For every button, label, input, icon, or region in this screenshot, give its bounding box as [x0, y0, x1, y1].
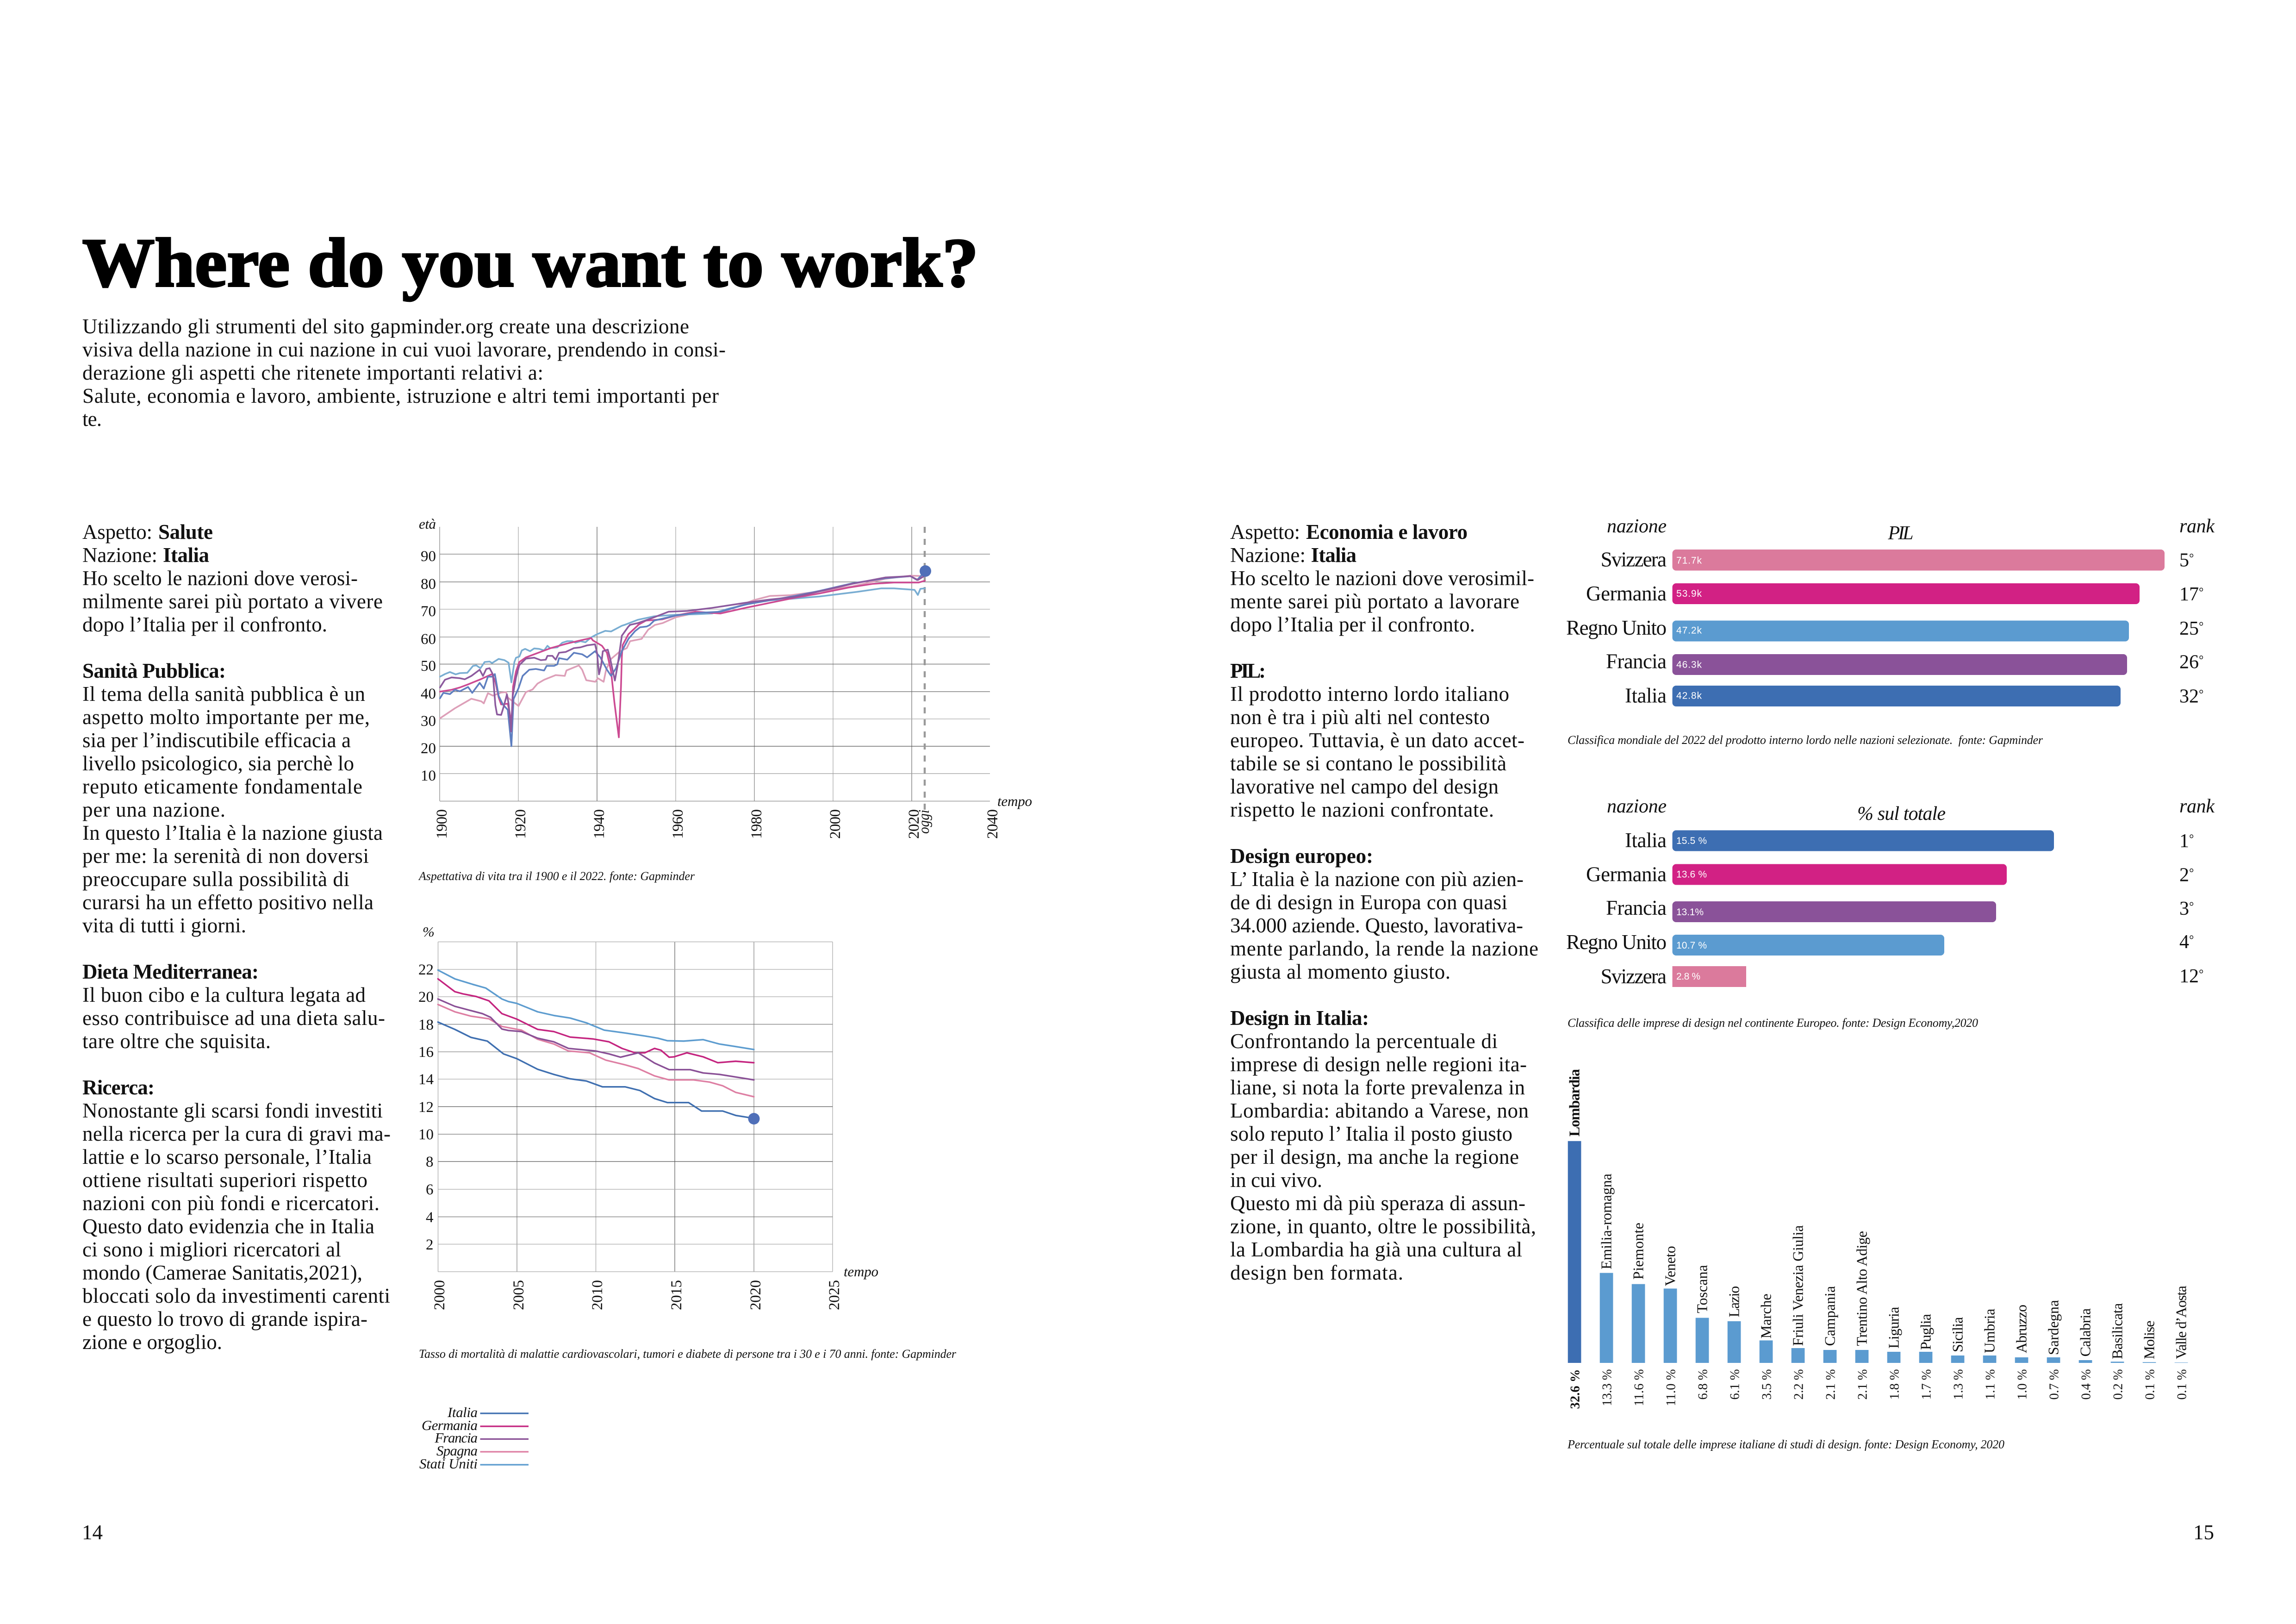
panel: salute text column: Nonostante gli scarsi fondi investiti	[82, 1099, 383, 1122]
row: Svizzera	[1600, 548, 2194, 571]
y axis labels	[421, 548, 436, 784]
panel: salute text column: livello psicologico, sia perchè lo	[82, 752, 354, 775]
bar: Lombardia	[1566, 1069, 1583, 1409]
bar: Veneto: Veneto	[1662, 1246, 1679, 1286]
panel: salute text column: In questo l’Italia è la nazione giusta	[82, 821, 383, 844]
panel: economia e lavoro text column: mente sarei più portato a lavorare	[1230, 590, 1519, 613]
row: Italia: 1	[2179, 831, 2189, 852]
intro text block: Salute, economia e lavoro, ambiente, istruzione e altri temi importanti per	[82, 384, 719, 407]
y axis labels: 18	[418, 1017, 434, 1033]
panel: economia e lavoro text column: per il design, ma anche la regione	[1230, 1145, 1519, 1168]
row: Francia: 26	[2179, 652, 2199, 673]
y axis labels: 12	[418, 1099, 434, 1116]
panel: salute text column: bloccati solo da investimenti carenti	[82, 1284, 390, 1307]
bar: Lombardia: Lombardia	[1566, 1069, 1583, 1137]
panel: salute text column: Dieta Mediterranea:	[82, 960, 259, 983]
panel: salute text column: e questo lo trovo di grande ispira-	[82, 1307, 367, 1330]
row: Regno Unito	[1566, 616, 2203, 642]
row: Regno Unito: Regno Unito	[1566, 616, 1667, 639]
chart: aspettativa di vita	[419, 516, 1032, 839]
row: Germania	[1586, 582, 2203, 605]
row: Regno Unito: °	[2189, 933, 2194, 946]
caption: mortalità: Tasso di mortalità di malattie cardiovascolari, tumori e diabete di persone tra i 30 e i 70 anni. fonte: Gapminder	[419, 1347, 957, 1361]
bar: Umbria: Umbria	[1981, 1309, 1998, 1353]
panel: economia e lavoro text column: in cui vivo.	[1230, 1168, 1322, 1192]
column heading: rank: rank	[2179, 516, 2215, 537]
bar: Sardegna: 0.7 %	[2047, 1369, 2062, 1400]
panel: economia e lavoro text column: dopo l’Italia per il confronto.	[1230, 613, 1475, 636]
panel: economia e lavoro text column	[1230, 520, 1538, 1284]
intro text block: te.	[82, 407, 102, 431]
row: Svizzera: 2.8 %	[1676, 971, 1700, 982]
x axis labels: 1960	[670, 809, 686, 839]
panel: salute text column: aspetto molto importante per me,	[82, 706, 370, 729]
x axis labels: 1900	[434, 809, 450, 839]
line: Germania	[440, 581, 925, 737]
row: Francia: Francia	[1606, 650, 1667, 673]
bar: Emilia-romagna: Emilia-romagna	[1598, 1174, 1615, 1269]
row: Germania: 2	[2179, 865, 2189, 886]
bar: Trentino Alto Adige: 2.1 %	[1856, 1369, 1870, 1400]
panel: economia e lavoro text column: lavorative nel campo del design	[1230, 775, 1499, 798]
bar: Puglia: Puglia	[1917, 1314, 1934, 1350]
bar: Lazio: Lazio	[1726, 1286, 1742, 1317]
chart heading: PIL: PIL	[1887, 523, 1913, 544]
panel: economia e lavoro text column: tabile se si contano le possibilità	[1230, 752, 1506, 775]
row: Francia: °	[2189, 899, 2194, 913]
bar: Emilia-romagna: 13.3 %	[1600, 1369, 1615, 1406]
x axis labels: 2020	[747, 1280, 764, 1310]
bar: Liguria: 1.8 %	[1888, 1369, 1902, 1400]
bar: Calabria: 0.4 %	[2079, 1369, 2094, 1400]
panel: economia e lavoro text column: zione, in quanto, oltre le possibilità,	[1230, 1215, 1536, 1238]
bar: Valle d'Aosta: 0.1 %	[2175, 1369, 2190, 1400]
bar: Veneto: 11.0 %	[1664, 1369, 1679, 1406]
panel: salute text column: Questo dato evidenzia che in Italia	[82, 1215, 374, 1238]
legend: Italia	[447, 1404, 478, 1420]
panel: economia e lavoro text column: liane, si nota la forte prevalenza in	[1230, 1076, 1525, 1099]
marker: oggi dashed line	[924, 527, 926, 811]
row: Germania: Germania	[1586, 863, 1667, 886]
panel: economia e lavoro text column: Ho scelto le nazioni dove verosimil-	[1230, 567, 1534, 590]
panel: economia e lavoro text column: mente parlando, la rende la nazione	[1230, 937, 1538, 960]
bar: Sicilia	[1949, 1317, 1966, 1400]
y axis labels: 2	[426, 1237, 433, 1253]
legend: Stati Uniti	[419, 1455, 478, 1472]
x axis labels: 1940	[591, 809, 608, 839]
row: Italia: °	[2199, 687, 2203, 701]
bar: Liguria: Liguria	[1885, 1307, 1902, 1349]
row: Svizzera: Svizzera	[1600, 965, 1667, 988]
x axis labels: 2000	[827, 809, 844, 839]
row: Francia: 3	[2179, 898, 2189, 919]
bar: Piemonte	[1630, 1223, 1647, 1406]
panel: economia e lavoro text column: Aspetto:	[1230, 520, 1300, 543]
bar: Lazio	[1726, 1286, 1742, 1400]
panel: salute text column: ci sono i migliori ricercatori al	[82, 1238, 341, 1261]
panel: salute text column	[82, 520, 391, 1354]
panel: economia e lavoro text column: Italia	[1311, 543, 1356, 567]
row: Svizzera: °	[2189, 551, 2194, 565]
y axis labels: 40	[421, 686, 436, 702]
bar: Sardegna: Sardegna	[2045, 1300, 2062, 1355]
row: Germania: °	[2189, 866, 2194, 880]
row: Italia: 32	[2179, 686, 2199, 707]
x axis labels: 2015	[668, 1280, 685, 1310]
bar: Valle d'Aosta: Valle d’Aosta	[2173, 1286, 2190, 1359]
bar: Puglia: 1.7 %	[1920, 1369, 1934, 1400]
row: Italia: Italia	[1625, 829, 1667, 852]
row: Germania: 53.9k	[1676, 588, 1702, 599]
legend: Francia	[434, 1430, 478, 1446]
x axis labels	[431, 1280, 843, 1310]
y axis labels: 16	[418, 1044, 434, 1061]
y axis labels: 6	[426, 1181, 433, 1198]
x axis labels: 2005	[510, 1280, 527, 1310]
bar: Piemonte: Piemonte	[1630, 1223, 1647, 1280]
intro text block: derazione gli aspetti che ritenete importanti relativi a:	[82, 361, 543, 384]
chart heading: percentuale sul totale: % sul totale	[1857, 803, 1946, 824]
caption: aspettativa di vita: Aspettativa di vita tra il 1900 e il 2022. fonte: Gapminder	[418, 869, 695, 883]
bar: Marche	[1758, 1293, 1774, 1400]
chart: tasso di mortalità	[418, 924, 878, 1310]
row: Francia	[1606, 896, 2194, 922]
legend: Spagna	[436, 1443, 478, 1459]
column heading: rank: rank	[2179, 796, 2215, 817]
row: Italia: Italia	[1625, 684, 1667, 707]
y axis labels: 20	[418, 989, 434, 1006]
y axis labels: 60	[421, 631, 436, 648]
caption: PIL: Classifica mondiale del 2022 del prodotto interno lordo nelle nazioni selezionate. fonte: Gapminder	[1568, 733, 2043, 747]
line: Stati Uniti	[440, 588, 925, 682]
y axis labels: 50	[421, 658, 436, 675]
panel: salute text column: preoccupare sulla possibilità di	[82, 868, 349, 891]
legend	[419, 1404, 529, 1472]
panel: salute text column: mondo (Camerae Sanitatis,2021),	[82, 1261, 362, 1284]
row: Italia: °	[2189, 832, 2194, 845]
panel: economia e lavoro text column: L’ Italia è la nazione con più azien-	[1230, 868, 1524, 891]
legend: Germania	[422, 1417, 478, 1433]
panel: salute text column: curarsi ha un effetto positivo nella	[82, 891, 373, 914]
panel: salute text column: Nazione:	[82, 543, 157, 567]
y axis labels: 70	[421, 603, 436, 620]
panel: economia e lavoro text column: de di design in Europa con quasi	[1230, 891, 1507, 914]
row: Regno Unito: 4	[2179, 931, 2189, 953]
panel: economia e lavoro text column: imprese di design nelle regioni ita-	[1230, 1053, 1527, 1076]
panel: salute text column: Ho scelto le nazioni dove verosi-	[82, 567, 358, 590]
y axis labels: 8	[426, 1154, 433, 1170]
line: Spagna	[440, 575, 925, 718]
row: Germania	[1586, 863, 2194, 886]
panel: economia e lavoro text column: Design in Italia:	[1230, 1006, 1369, 1030]
y axis labels: 90	[421, 548, 436, 565]
y axis labels: 20	[421, 740, 436, 757]
panel: salute text column: dopo l’Italia per il confronto.	[82, 613, 327, 636]
panel: economia e lavoro text column: Questo mi dà più speraza di assun-	[1230, 1192, 1525, 1215]
panel: economia e lavoro text column: Economia e lavoro	[1306, 520, 1468, 543]
row: Svizzera: 71.7k	[1676, 556, 1702, 566]
x axis labels: 2010	[589, 1280, 606, 1310]
row: Italia: 15.5 %	[1676, 836, 1707, 846]
bar: Lombardia: 32.6 %	[1568, 1369, 1583, 1409]
y axis labels: 10	[421, 768, 436, 784]
panel: economia e lavoro text column: Design europeo:	[1230, 844, 1373, 868]
bar: Toscana: Toscana	[1694, 1265, 1711, 1313]
panel: salute text column: Ricerca:	[82, 1076, 155, 1099]
bar: Sicilia: Sicilia	[1949, 1317, 1966, 1352]
bar: Basilicata: Basilicata	[2109, 1303, 2126, 1359]
row: Italia	[1625, 684, 2203, 707]
intro text block	[82, 315, 726, 431]
panel: salute text column: Sanità Pubblica:	[82, 659, 226, 682]
bar: Sardegna	[2045, 1300, 2062, 1400]
row: Svizzera: 5	[2179, 550, 2189, 571]
panel: economia e lavoro text column: solo reputo l’ Italia il posto giusto	[1230, 1122, 1512, 1145]
row: Francia: Francia	[1606, 896, 1667, 919]
x axis labels: 2000	[431, 1280, 448, 1310]
panel: economia e lavoro text column: design ben formata.	[1230, 1261, 1403, 1284]
bar: Marche: 3.5 %	[1760, 1369, 1774, 1400]
page number: 14: 14	[82, 1521, 103, 1544]
x axis labels: 2040	[984, 809, 1001, 839]
panel: salute text column: tare oltre che squisita.	[82, 1030, 271, 1053]
panel: salute text column: Italia	[163, 543, 209, 567]
caption: regioni italiane: Percentuale sul totale delle imprese italiane di studi di design. fonte: Design Economy, 2020	[1567, 1438, 2004, 1451]
panel: economia e lavoro text column: rispetto le nazioni confrontate.	[1230, 798, 1494, 821]
bar: Basilicata	[2109, 1303, 2126, 1400]
bar: Sicilia: 1.3 %	[1952, 1369, 1966, 1400]
row: Francia: 46.3k	[1676, 659, 1702, 670]
row: Francia: 13.1%	[1676, 907, 1704, 918]
bar: Emilia-romagna	[1598, 1174, 1615, 1406]
bar chart: regioni italiane	[1566, 1069, 2190, 1409]
bar: Basilicata: 0.2 %	[2111, 1369, 2126, 1400]
title: Where do you want to work?	[82, 225, 978, 301]
bar: Molise	[2141, 1320, 2158, 1400]
row: Francia: °	[2199, 653, 2203, 667]
panel: economia e lavoro text column: Lombardia: abitando a Varese, non	[1230, 1099, 1529, 1122]
row: Francia	[1606, 650, 2203, 675]
row: Svizzera: 12	[2179, 966, 2199, 987]
panel: salute text column: sia per l’indiscutibile efficacia a	[82, 729, 351, 752]
line: Stati Uniti	[438, 970, 754, 1049]
y axis labels	[418, 962, 434, 1253]
bar: Lazio: 6.1 %	[1728, 1369, 1742, 1400]
line: Francia	[440, 575, 925, 731]
panel: economia e lavoro text column: Confrontando la percentuale di	[1230, 1030, 1498, 1053]
panel: salute text column: zione e orgoglio.	[82, 1330, 222, 1354]
bar: Abruzzo: 1.0 %	[2016, 1369, 2030, 1400]
panel: economia e lavoro text column: non è tra i più alti nel contesto	[1230, 706, 1490, 729]
intro text block: Utilizzando gli strumenti del sito gapminder.org create una descrizione	[82, 315, 689, 338]
bar: Friuli Venezia Giulia: 2.2 %	[1792, 1369, 1806, 1400]
bar: Valle d'Aosta	[2173, 1286, 2190, 1400]
panel: economia e lavoro text column: PIL:	[1230, 659, 1266, 682]
axis title: età: età	[419, 516, 436, 532]
row: Italia: 42.8k	[1676, 691, 1702, 701]
panel: salute text column: reputo eticamente fondamentale	[82, 775, 362, 798]
caption: imprese di design in Europa: Classifica delle imprese di design nel continente Europeo. fonte: Design Economy,2020	[1568, 1016, 1978, 1030]
panel: economia e lavoro text column: giusta al momento giusto.	[1230, 960, 1450, 983]
column heading: nazione: nazione	[1607, 796, 1667, 817]
row: Regno Unito: °	[2199, 619, 2203, 633]
panel: salute text column: Il tema della sanità pubblica è un	[82, 682, 365, 706]
x axis labels: 1920	[512, 809, 529, 839]
panel: salute text column: Il buon cibo e la cultura legata ad	[82, 983, 366, 1006]
bar: Marche: Marche	[1758, 1293, 1774, 1338]
panel: economia e lavoro text column: Nazione:	[1230, 543, 1306, 567]
row: Svizzera	[1600, 965, 2203, 988]
page number: 15: 15	[2193, 1521, 2214, 1544]
row: Regno Unito: 25	[2179, 618, 2199, 639]
row: Italia	[1625, 829, 2194, 852]
intro text block: visiva della nazione in cui nazione in cui vuoi lavorare, prendendo in consi-	[82, 338, 726, 361]
row: Regno Unito: 10.7 %	[1676, 940, 1707, 951]
x axis labels	[434, 809, 1001, 839]
x axis labels: 1980	[748, 809, 765, 839]
bar: Puglia	[1917, 1314, 1934, 1400]
row: Regno Unito: 47.2k	[1676, 625, 1702, 636]
panel: salute text column: Aspetto:	[82, 520, 152, 543]
bar: Friuli Venezia Giulia: Friuli Venezia Giulia	[1790, 1225, 1806, 1346]
row: Svizzera: °	[2199, 967, 2203, 981]
y axis labels: 80	[421, 576, 436, 593]
bar: Calabria: Calabria	[2077, 1308, 2094, 1356]
bar: Trentino Alto Adige: Trentino Alto Adige	[1854, 1231, 1870, 1346]
line: Italia	[440, 571, 925, 746]
bar: Piemonte: 11.6 %	[1632, 1369, 1647, 1406]
bar: Trentino Alto Adige	[1854, 1231, 1870, 1400]
y axis labels: 4	[426, 1209, 433, 1226]
line: Italia	[438, 1022, 754, 1118]
row: Germania: Germania	[1586, 582, 1667, 605]
row: Germania: 13.6 %	[1676, 869, 1707, 880]
bar: Campania	[1822, 1286, 1838, 1400]
panel: economia e lavoro text column: Il prodotto interno lordo italiano	[1230, 682, 1509, 706]
panel: salute text column: nella ricerca per la cura di gravi ma-	[82, 1122, 391, 1145]
y axis labels: 10	[418, 1126, 434, 1143]
panel: salute text column: milmente sarei più portato a vivere	[82, 590, 383, 613]
axis title: tempo: tempo	[997, 793, 1032, 809]
column heading: nazione: nazione	[1607, 516, 1667, 537]
bar: Veneto	[1662, 1246, 1679, 1406]
x axis labels: 2025	[826, 1280, 843, 1310]
bar: Molise: 0.1 %	[2143, 1369, 2158, 1400]
bar: Molise: Molise	[2141, 1320, 2158, 1359]
bar chart: imprese di design in Europa	[1566, 796, 2215, 988]
panel: salute text column: per una nazione.	[82, 798, 225, 821]
x axis labels: oggi	[916, 810, 933, 834]
bar: Umbria: 1.1 %	[1984, 1369, 1998, 1400]
row: Germania: °	[2199, 585, 2203, 599]
row: Regno Unito	[1566, 931, 2194, 956]
panel: economia e lavoro text column: europeo. Tuttavia, è un dato accet-	[1230, 729, 1524, 752]
line: Germania	[438, 979, 754, 1063]
row: Svizzera: Svizzera	[1600, 548, 1667, 571]
panel: economia e lavoro text column: la Lombardia ha già una cultura al	[1230, 1238, 1522, 1261]
panel: salute text column: esso contribuisce ad una dieta salu-	[82, 1006, 385, 1030]
bar: Toscana	[1694, 1265, 1711, 1400]
bar: Calabria	[2077, 1308, 2094, 1400]
y axis labels: 14	[418, 1071, 434, 1088]
bar: Toscana: 6.8 %	[1696, 1369, 1711, 1400]
y axis labels: 22	[418, 962, 434, 978]
bar: Campania: Campania	[1822, 1286, 1838, 1346]
panel: salute text column: Salute	[158, 520, 213, 543]
bar: Abruzzo	[2013, 1305, 2030, 1400]
bar: Friuli Venezia Giulia	[1790, 1225, 1806, 1400]
bar chart: PIL	[1566, 516, 2215, 707]
marker: Italia dot	[748, 1113, 760, 1124]
y axis labels: 30	[421, 713, 436, 730]
row: Regno Unito: Regno Unito	[1566, 931, 1667, 954]
panel: salute text column: per me: la serenità di non doversi	[82, 844, 369, 868]
line: Spagna	[438, 1005, 754, 1097]
panel: salute text column: ottiene risultati superiori rispetto	[82, 1168, 367, 1192]
row: Germania: 17	[2179, 584, 2199, 605]
marker: Italia dot	[920, 565, 931, 577]
panel: salute text column: nazioni con più fondi e ricercatori.	[82, 1192, 380, 1215]
bar: Abruzzo: Abruzzo	[2013, 1305, 2030, 1353]
x axis labels: 2020	[906, 809, 922, 839]
line: Francia	[438, 999, 754, 1080]
panel: economia e lavoro text column: 34.000 aziende. Questo, lavorativa-	[1230, 914, 1523, 937]
axis title: percent: %	[423, 924, 435, 940]
bar: Campania: 2.1 %	[1824, 1369, 1838, 1400]
bar: Liguria	[1885, 1307, 1902, 1400]
bar: Umbria	[1981, 1309, 1998, 1400]
panel: salute text column: lattie e lo scarso personale, l’Italia	[82, 1145, 372, 1168]
axis title: tempo: tempo	[844, 1263, 878, 1280]
panel: salute text column: vita di tutti i giorni.	[82, 914, 246, 937]
